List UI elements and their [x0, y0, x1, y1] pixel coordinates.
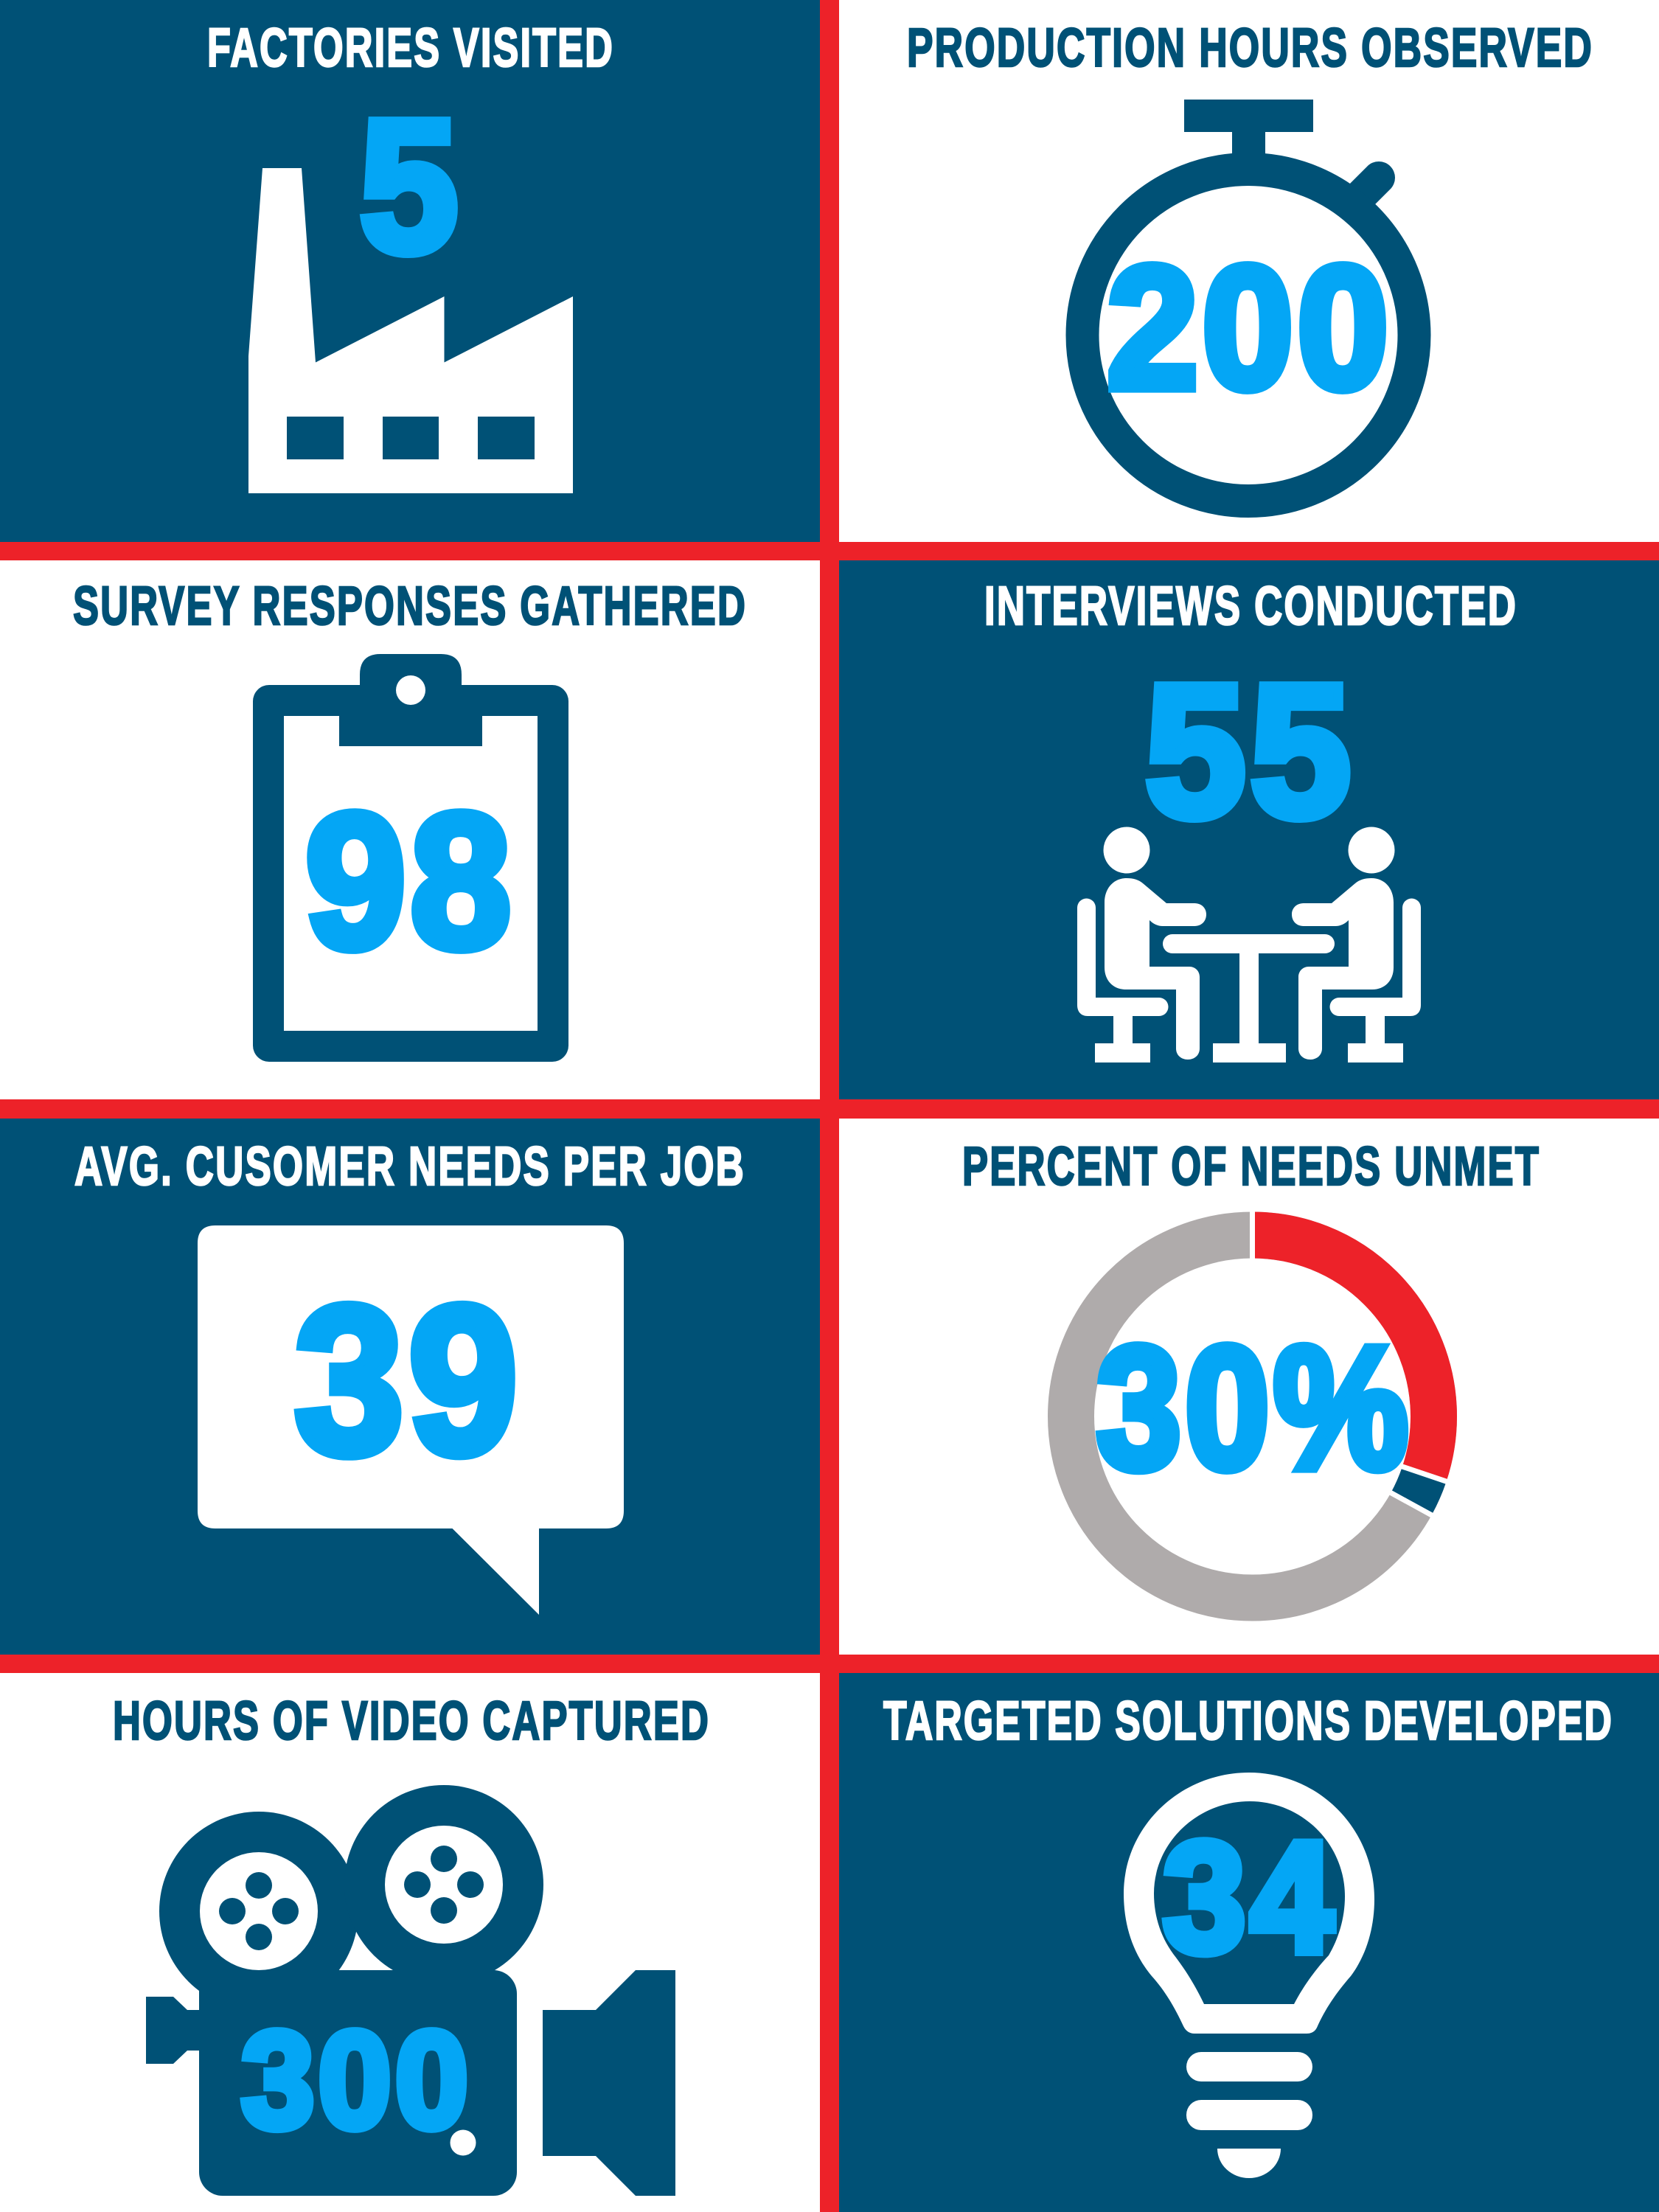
heading: survey responses gathered: SURVEY RESPONSES GATHERED [73, 575, 747, 636]
number: 200: 200 [1107, 231, 1393, 425]
left person and chair [1077, 827, 1206, 1062]
panel: targeted solutions developed [839, 1673, 1659, 2212]
icon: factory [248, 168, 573, 493]
panel: percent of needs unmet [839, 1119, 1659, 1655]
number: 55: 55 [1145, 646, 1355, 857]
icon: stopwatch [1082, 100, 1414, 501]
panel: production hours observed [839, 0, 1659, 542]
icon: two people at a table [1077, 827, 1421, 1062]
heading: factories visited: FACTORIES VISITED [207, 17, 614, 78]
number: 39: 39 [295, 1262, 523, 1498]
number: 98: 98 [305, 773, 515, 987]
icon: light bulb [1124, 1773, 1374, 2178]
right person and chair [1292, 827, 1421, 1062]
table [1163, 934, 1335, 1062]
heading: hours of video captured: HOURS OF VIDEO CAPTURED [113, 1690, 710, 1751]
icon: clipboard [253, 654, 568, 1062]
heading: avg. cusomer needs per job: AVG. CUSOMER NEEDS PER JOB [74, 1135, 745, 1197]
panel: hours of video captured [0, 1673, 820, 2212]
number: 300: 300 [242, 2004, 472, 2157]
number: 34: 34 [1164, 1809, 1338, 1985]
panel: interviews conducted [839, 560, 1659, 1099]
icon: speech bubble [198, 1225, 624, 1615]
icon: film camera [146, 1785, 675, 2196]
chart: donut 30 percent [1071, 1202, 1453, 1598]
number: 30%: 30% [1097, 1311, 1413, 1505]
panel: average customer needs per job [0, 1119, 820, 1655]
panel: factories visited [0, 0, 820, 542]
panel: survey responses gathered [0, 560, 820, 1099]
number: 5: 5 [360, 81, 458, 292]
